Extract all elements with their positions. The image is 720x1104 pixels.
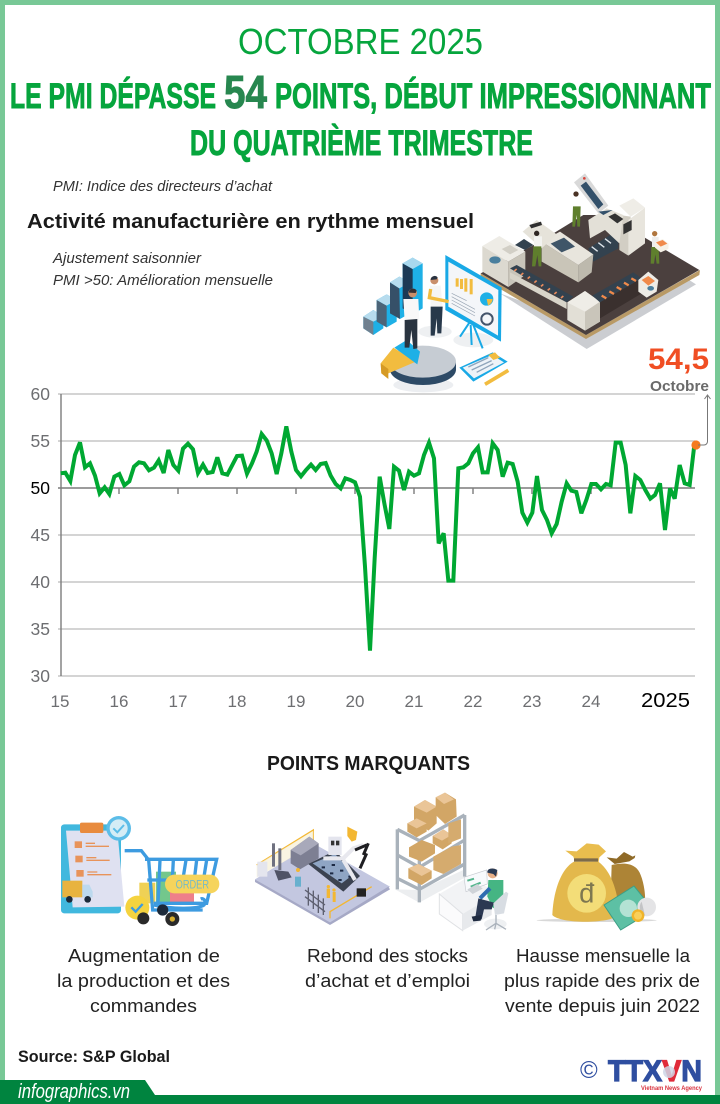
y-axis labels: 60 <box>31 384 50 404</box>
illustration: people analysing a presentation <box>363 255 508 392</box>
x-axis labels: 22 <box>464 692 482 711</box>
currency coin <box>567 874 606 913</box>
front bag <box>552 862 619 922</box>
title block <box>10 21 711 163</box>
workers <box>532 191 669 266</box>
presenter <box>418 326 452 338</box>
caption: selling prices: plus rapide des prix de <box>504 970 700 991</box>
highlights heading: POINTS MARQUANTS <box>267 753 470 775</box>
presentation board <box>453 333 493 347</box>
caption: purchasing stocks and employment: Rebond des stocks <box>307 945 468 966</box>
caption: production and orders <box>57 945 230 1016</box>
icon: automated factory floor <box>255 827 390 925</box>
icon: clipboard and shopping cart: ORDER <box>176 878 209 891</box>
x-axis labels: 24 <box>582 692 600 711</box>
person on pie <box>394 340 420 364</box>
caption: selling prices <box>504 945 700 1016</box>
callout value: 54,5 <box>648 343 709 376</box>
banknotes <box>604 886 653 930</box>
caption: selling prices: vente depuis juin 2022 <box>505 995 700 1016</box>
bar cubes <box>363 310 383 335</box>
title: headline line 1: LE PMI DÉPASSE <box>10 76 216 116</box>
footer bar with site name: infographics.vn <box>18 1081 130 1103</box>
caption: production and orders: commandes <box>90 995 197 1016</box>
office worker <box>488 868 498 878</box>
source note: Source: S&P Global <box>18 1048 170 1066</box>
PMI definition note: PMI: Indice des directeurs d’achat <box>53 179 273 195</box>
caption: purchasing stocks and employment: d’achat et d’emploi <box>305 970 470 991</box>
y-axis labels <box>31 384 50 686</box>
y-axis labels: 45 <box>31 525 50 545</box>
y-axis labels: 35 <box>31 619 50 639</box>
shelving <box>395 870 463 903</box>
caption: selling prices: Hausse mensuelle la <box>516 945 691 966</box>
desk <box>439 876 497 914</box>
caption: purchasing stocks and employment <box>305 945 470 991</box>
callout arrow <box>698 395 710 445</box>
front bottom machine <box>567 291 600 331</box>
rear conveyor <box>588 230 618 262</box>
x-axis labels: 20 <box>346 692 364 711</box>
callout month: Octobre <box>650 378 709 395</box>
PMI series line <box>61 426 694 651</box>
chart notes: PMI >50: Amélioration mensuelle <box>53 273 273 289</box>
y-axis labels: 40 <box>31 572 50 592</box>
line chart <box>31 343 710 712</box>
x-axis labels: 17 <box>169 692 187 711</box>
chart heading: Activité manufacturière en rythme mensuel <box>27 211 474 233</box>
clipboard <box>459 352 508 382</box>
title: headline line 2: DU QUATRIÈME TRIMESTRE <box>190 123 533 163</box>
chart notes <box>52 251 273 289</box>
pie chart <box>393 378 453 392</box>
y-axis labels: 30 <box>31 666 50 686</box>
boxes <box>407 793 461 885</box>
x-axis labels: 16 <box>110 692 128 711</box>
chart notes: Ajustement saisonnier <box>52 251 202 267</box>
x-axis labels: 23 <box>523 692 541 711</box>
rear machine tower <box>619 215 631 256</box>
agency logo: Vietnam News Agency <box>641 1085 702 1092</box>
left machine <box>482 246 508 287</box>
right conveyor <box>592 272 642 302</box>
x-axis labels: 21 <box>405 692 423 711</box>
title: month: OCTOBRE 2025 <box>238 21 483 62</box>
caption: production and orders: la production et des <box>57 970 230 991</box>
front conveyor <box>510 265 573 302</box>
icon: money bags: đ <box>579 878 595 909</box>
latest value marker <box>691 440 701 450</box>
y-axis labels: 55 <box>31 431 50 451</box>
illustration: factory production line <box>481 173 700 349</box>
icon: money bags <box>537 843 657 930</box>
x-axis labels: 19 <box>287 692 305 711</box>
x-axis labels: 18 <box>228 692 246 711</box>
title: headline line 1: 54 <box>224 66 267 118</box>
copyright symbol: © <box>580 1057 598 1084</box>
x-axis labels: 2025 <box>641 690 690 712</box>
x-axis labels <box>51 690 690 712</box>
icon: clipboard and shopping cart <box>61 816 219 926</box>
central machine <box>542 242 578 282</box>
title: headline line 1 <box>10 66 711 118</box>
icon: warehouse shelves and office worker <box>395 793 508 931</box>
footer bar with site name <box>0 1080 720 1104</box>
x-axis labels: 15 <box>51 692 69 711</box>
back bag <box>610 864 645 918</box>
caption: production and orders: Augmentation de <box>68 945 220 966</box>
agency logo: TTXVN <box>608 1055 702 1088</box>
y-axis labels: 50 <box>31 478 50 498</box>
